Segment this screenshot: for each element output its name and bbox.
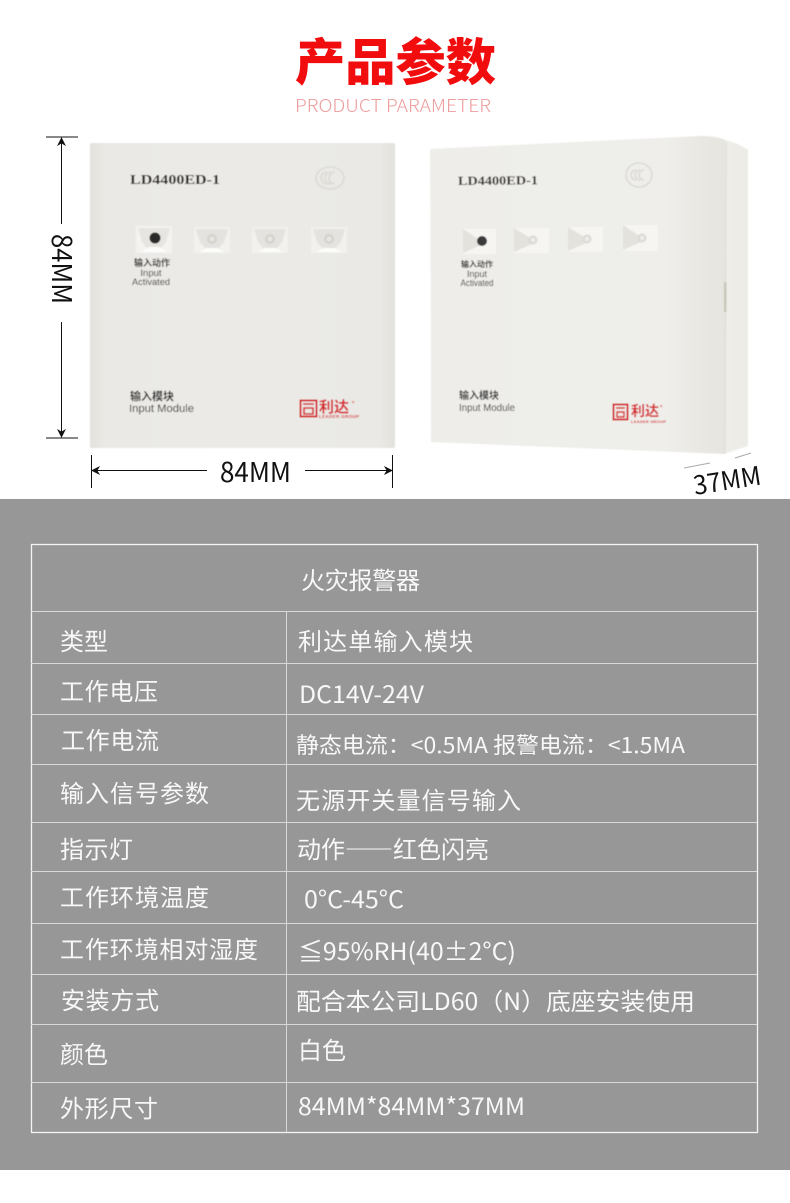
parameter table <box>31 544 758 1132</box>
title: 产品参数 <box>295 23 496 95</box>
row: type: 利达单输入模块 <box>298 622 473 657</box>
indicator label: Activated <box>460 278 494 288</box>
module label: Input Module <box>459 402 515 414</box>
row: colour: 颜色 <box>60 1035 108 1070</box>
row: input signal parameter: 输入信号参数 <box>60 774 209 809</box>
row: working humidity: ≦95%RH(40±2°C) <box>298 932 516 967</box>
model number: LD4400ED-1 <box>130 172 220 187</box>
icon: CCC mark <box>316 167 344 189</box>
height dimension: 84MM: 84MM <box>44 234 83 304</box>
logo: Leader <box>614 401 666 424</box>
row: installation: 安装方式 <box>61 981 159 1016</box>
logo: Leader: 利达 <box>631 401 659 421</box>
row: working current <box>61 721 686 760</box>
indicator label: Input <box>140 268 162 279</box>
table grid <box>31 544 758 1132</box>
indicator label: Activated <box>132 277 170 288</box>
front product photo: input module <box>90 143 395 448</box>
indicator label: 输入动作 <box>461 259 493 270</box>
row: dimensions <box>60 1087 525 1124</box>
row: working voltage: DC14V-24V <box>299 675 424 710</box>
row: working temperature: 工作环境温度 <box>60 878 209 913</box>
width dimension: 84MM: 84MM <box>220 451 291 490</box>
row: dimensions: 外形尺寸 <box>60 1089 158 1124</box>
row: working current: 工作电流 <box>61 721 159 756</box>
indicator label <box>460 259 494 288</box>
row: dimensions: 84MM*84MM*37MM <box>298 1087 525 1122</box>
logo: Leader <box>300 396 359 419</box>
row: input signal parameter: 无源开关量信号输入 <box>296 781 521 816</box>
row: working current: 静态电流：<0.5MA 报警电流：<1.5MA <box>296 728 686 760</box>
row: indicator light: 指示灯 <box>60 830 133 865</box>
row: indicator light <box>60 830 489 865</box>
table header: 火灾报警器 <box>301 561 420 596</box>
indicator label: Input <box>467 269 488 279</box>
row: type: 类型 <box>60 622 108 657</box>
row: working humidity <box>60 930 516 967</box>
module label: Input Module <box>129 403 194 415</box>
module label: 输入模块 <box>459 387 499 402</box>
row: working voltage: 工作电压 <box>60 672 158 707</box>
logo: Leader: 利达 <box>319 396 349 417</box>
row: working temperature <box>60 878 404 915</box>
indicator label: 输入动作 <box>134 256 170 269</box>
model number: LD4400ED-1 <box>458 173 538 188</box>
angled product photo: input module <box>430 136 748 454</box>
row: input signal parameter <box>60 774 521 816</box>
row: working temperature: 0°C-45°C <box>304 880 404 915</box>
module label <box>459 387 515 414</box>
module label: 输入模块 <box>130 388 174 404</box>
module label <box>129 388 194 415</box>
indicator label <box>132 256 170 288</box>
logo: Leader: ® <box>352 400 355 407</box>
row: type <box>60 622 473 657</box>
row: installation <box>61 981 695 1017</box>
indicator windows <box>463 225 658 254</box>
logo: Leader: ® <box>660 404 663 411</box>
row: installation: 配合本公司LD60（N）底座安装使用 <box>296 982 695 1017</box>
subtitle: PRODUCT PARAMETER <box>295 92 491 118</box>
depth dimension: 37MM: 37MM <box>690 456 763 503</box>
logo: Leader: LEADER GROUP <box>631 419 666 424</box>
row: working voltage <box>60 672 424 710</box>
row: indicator light: 动作——红色闪亮 <box>297 830 489 865</box>
row: colour: 白色 <box>298 1031 346 1066</box>
logo: Leader: LEADER GROUP <box>319 414 359 419</box>
icon: CCC mark <box>626 163 652 187</box>
row: working humidity: 工作环境相对湿度 <box>60 930 258 965</box>
indicator windows <box>136 226 347 253</box>
gray table panel <box>0 499 790 1170</box>
row: colour <box>60 1031 346 1070</box>
